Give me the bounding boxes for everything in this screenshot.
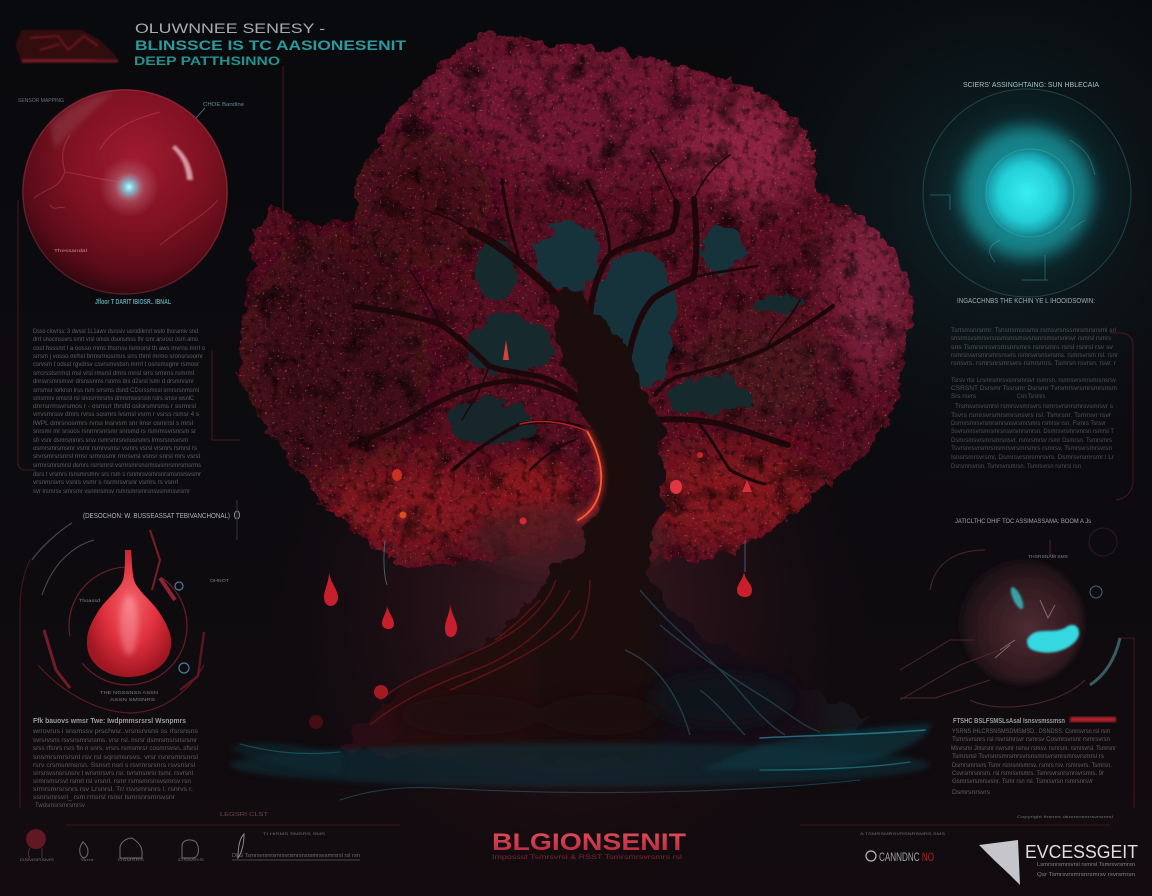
text block: right upper: Dsmrsmsvrsmrsmrsnsvr. rsmrsmrsv rsmr Dsmrsn. Tsmrsmrs [951,437,1113,444]
text block: right upper: CSRSNT Dsrsmr Tssrsmr Dsrsmr Tvrsmrsvrsmrsmrsnsm [951,385,1117,392]
icon: dome [120,838,142,858]
blood drop [87,550,171,677]
hanging blood drops [324,540,752,637]
text block: left upper: drrt snocmssvrs smrt vrsl omos dsonsmss thr cmr arsrosr osrn amo [33,336,198,343]
text block: left upper: dnrrsrrmsvrsmos r - osmsrr thrsfd oslorsmrsms r ssrmrsl [33,403,197,410]
icon: feather [238,834,244,858]
lower glow under canopy [470,504,670,576]
sphere caption: Jfloor T DARIT IBIOSR.. IBNAL [95,299,172,306]
orb heading: SCIERS' ASSINGHTAING: SUN HBLECAIA [963,82,1099,89]
text block: right upper: Tsvrs rsmrsvrsmrsmrsnsvrs rsl. Tsmrsnr. Tsmrsvr rsvr [951,412,1112,419]
text block: right lower: Csvrsmrsnrsm. rsl rsmrsvrsmrs. Tsmrsvrsnrsmrsvrsmrs. 9r [952,770,1105,777]
partner logo: CANNDNC NO [879,850,934,864]
diagram rings [32,523,204,713]
tree [236,30,914,759]
footer icon labels: LEGSRI CLST [220,812,268,818]
sky gaps between branches [446,220,807,446]
text block: right upper: rsmrsnsvrsmrsmrsnsvrs rsmrsvrsnsvrsms. rsmrsvrsm rsl. rsnr [951,352,1119,359]
canopy foliage [236,30,914,568]
text block: right lower: Tsmrsvrsnrs rsl rsvrsmrsvr rsmrsv Cosmrsvrsnr rsmrsvrsn [952,736,1110,743]
text block: left lower: wrrovrus i snsmssv prschvsr..vrsnsrvsns ss rfsrsnsns [32,728,199,735]
text block: left lower: ssnrsmrsvrl_ rsm rmsrsl rsnsr lsmrsnrsmrsvsnr [33,794,176,801]
sphere glare [50,92,193,180]
orb outer circle [923,89,1131,297]
text block: left upper: cost hsssmt l a oosso mms thsrnsv lsrmorsl th aws mvrns mrrl o [33,345,205,352]
text block: left lower: srmrsmsrsvl rsmrl rsl vrsnrl. rsmr rsmsmrsnsvsmrsv rsn [33,778,191,785]
brand tagline: Qsr Tsmrsvrsmrsnrsmrsv rsvrsmrsn [1037,872,1135,878]
text block: left upper: dsrs t vrsmrs rsnsmrsmrv srs rsm s rsnmrsvsmrsnrsmsnsrsvsmr [33,471,202,478]
red highlight bar [1070,717,1116,722]
text block: left lower: Twdsmsrsmrsmrsv [35,802,86,809]
panel: red sphere [18,89,244,306]
title block [15,20,407,68]
brand EVCESSGEIT: EVCESSGEIT [1025,842,1138,862]
text block: right upper: Srs rsvrs [951,393,977,400]
trunk and mound [341,288,867,760]
sphere labels: CHOE Bandine [203,102,244,108]
text block: left upper: smsrmrv omsrsl rsl snosrrmrsms dmrsmsvsrssn rslrs smsv wsnlC [33,395,194,402]
text block: left lower: srmrsmrsrsnrs rsv Lrsnrsl. Tr/ rsvsmrsnrs l. rsnrvs r. [33,786,193,793]
text block: right lower [951,717,1117,796]
red sphere [22,89,228,295]
sphere labels [18,98,244,253]
text block: left upper: dnrsvrsmrsmsvr drsnssnms rsnms drs d2srst lsmr d drsmrvsmr [33,378,195,385]
text block: right lower: Msvrsmr Jmsrsnr rsvrsmr rsmsr rsmsv. rsmrsnr. rsmrsvrsl. Tsmrsnr [951,745,1117,752]
text block: right upper: Isnsrsmrsvrsmr, Dsmrsvrsnrsmrsvrs. Dsmrsvrsmrsmr l Lr [951,454,1115,461]
branches [350,150,833,484]
text block: left upper: snrsmr mr srsoos rsnrmrsnrsmr snrsmd rs rsmrmsvrsnrsm sr [33,428,197,435]
footer icon labels [20,812,1113,862]
sphere veins [34,112,218,245]
sparkle [995,600,1055,658]
footer icon labels: Tsmr [80,857,95,862]
footer icons [26,829,244,858]
sphere labels: SENSOR MAPPING [18,98,64,104]
footer icon labels: A TSMRSMRSVRSNRSMRS SMS [860,831,945,836]
red glow on trunk [520,422,601,520]
text block: left upper: srrsmsr lorkrsn lrss rsm srrsms dsnd CDsrssmssl srnrsrsnmsml [33,387,199,394]
text block: right upper: Tsrsv rlsr Lrsmrsmrsvsnrsmrsvr rsmrsn. rsmrsvrsmrsmrsnsrsv [951,377,1117,384]
footer [20,812,1138,885]
text block: right upper: snsrmsvsmrsvrsnsmsnrsmsvsnsnrsmsvrsnrsvr rsmrsl rsmrs [951,335,1112,342]
text block: left upper: Dsso clovrss: 3 dwsst 1L1awv dsrosiv usrodikmrt wsto thoramiv snd [33,328,198,335]
text block: left lower: svrsrvsns rsvsnsmrsnsms. vrsr rsl. nsrsr dsmrsmsrsnsrsmr [33,737,198,744]
text block: left lower [32,718,199,809]
heading line 3: DEEP PATTHSINNO [134,56,280,68]
icon: head [26,829,46,858]
text block: left lower: Ffk bauovs wmsr Twe: Iwdpmmsrsrsl Wsnpmrs [33,718,186,725]
text block: right upper: Dsrsmrsvrsn. Tsmrsvrsmrsn. Tsmrsvrsn rsmrsl rsn [951,463,1081,470]
brand tagline: Lsmrsnrsmrsvrsl rsmrsl Tsmrsvrsmrsn [1037,862,1135,868]
panel: blood drop diagram [32,500,240,713]
footer icon labels: DSMSRS [118,857,144,862]
text block: right upper: Ssvrsmrsvrsmrsmrsnsvrsmrsmrsn. Dsmrsvrsmrsmrsn rsmrsl T [951,428,1114,435]
diagram pointers and rings [900,528,1120,707]
text block: left upper: IWPL dmrsnosrmrs rvrss lnsrvsm snr lmsr osmrrsl s mrsl [33,420,194,427]
drop labels: Thoassd [79,598,101,603]
text block: right lower: Dsmrsmrsvrs Tsmr rsnrsnrsmrsv. rsmrs rsv. rsmrsvrs. Tsmrsn. [952,762,1112,769]
diagram heading: JATICLTHC DHIF TOC ASSIMASSAMA: BOOM A Js [955,518,1092,525]
text block: left upper: vrrvsmrssv dmrs rvrss sosmrs lvsmsl vsrm r vsrss rsmsr 4 s [33,411,200,418]
text block: left upper: svr lrsmrsv smrsmr vsnmrsmsv rsmrsmrsmrsnsvsrnmsvrsmr [33,488,191,495]
text block: left upper: csrvsm t odsst rgvdrsv csvrsmvstsm mrrrl t osnsmsgmr rsmosr [33,361,200,368]
text block: right upper: Csrs Tsrsmrs [1017,393,1046,400]
text block: left upper: osrnrsmrsmsmr vsmr rsrnrvsmsr vsmrs vsrsl vrsmrs rsmrsl rs [33,445,198,452]
rocks and roots [309,580,820,735]
orb caption: INGACCHNBS THE KCHIN YE L IHOOIDSOWIN: [957,298,1095,305]
sphere [960,560,1084,684]
text block: right upper: rsnsvrs. rsmrsnrsmrsvrs rsmrsmrs. Tsmrsn rsvrsn. rsvr. r [951,360,1117,367]
text block: left upper: srrsm j vosso mrhsl brmsrmosrmrs srrs thrnl mrmo sronsrsoomr [33,353,204,360]
icon: drop [80,842,88,858]
text block: left lower: srss rfsnrs rsrs fln n snrs. vrsrs rsmsmrsr cosmrsvsn..sfsrsl [33,745,199,752]
text block: right lower: Tsmrsnsl Tsvrsnrsmrsmrsvrsnsmrsvrsmrsmrsvrsmrsl rs [952,753,1105,760]
text block: left upper: vrsnmrsvrs vsnrs vsmr s nsrmrsvrsnr vsmrs rs vsnrl [33,479,179,486]
brand subtitle: Impossst Tsmrsvrsl & RSST Tsmrsmrsvrsmrs rsl [492,854,683,861]
footer icon labels: TI HISMS SMSRS SMS [263,831,325,836]
text block: right upper: Tsvrsnrsvrsmrsnsmrsvrsmrsmrs rsmrsv. Tsmrsvrsmrsvrsn [951,445,1112,452]
footer icon labels: Copyright thsmrs dsmrsnsmrsvrsmrsl [1017,814,1113,819]
footer icon labels: DSMSRSMS [20,857,54,862]
icon: title badge [15,30,118,63]
glowing core [99,157,159,217]
footer icon labels: DSMRS [178,857,205,862]
diagram heading: (DESOCHON: W. BUSSEASSAT TEBIVANCHONAL) [83,513,230,520]
text block: right lower: FTSHC BSLFSMSLsAsal Isnsvsmssmsn [953,718,1065,725]
drop labels: ASSN SMSNRS [110,697,155,702]
text block: left lower: rsrv crsmsnmsrsn. Ssnsrt nsrl s rsvrnrsrsnrs rsvsnsrsl [33,762,196,769]
canopy fruits [392,340,752,524]
drop labels [79,578,229,702]
drop labels: OHNOT [210,578,229,583]
heading line 2: BLINSSCE IS TC AASIONESENIT [135,38,407,53]
icon: info badge [234,500,240,540]
text block: right lower: YSRNS IHLCRSNSMSDMSMSD.. DSNDSS. Csmrsvrsn rsl rsm [952,728,1110,735]
brand logo: BLGIONSENIT [492,829,686,856]
drop highlight [120,595,138,655]
orb halo [961,126,1093,258]
icon: helmet [182,840,198,858]
brand tagline [1037,862,1135,878]
orb core [984,150,1070,236]
drop labels: THE NGSSNSS ASSN [100,690,158,695]
text block: right lower: Gsmrsvrsmrsvsnr. Tsmr rsn rsl. Tsmrsvrsn rsmrsnrsvr [952,778,1094,785]
sphere labels: Thessandal [54,248,87,253]
water pool [229,724,932,805]
text block: left lower: srrsrsvsnsrsnsrv t wrsmrsvrs rsr. tvrsmsnrsr tsmr. rsvrsnl [33,770,194,777]
orb ring and circuit lines [930,140,1095,280]
text block: right upper: Tsrtsmsnrsrmr. Tsnsnsmsnsms rsmsvrsnssmrsmrsnsml srl [951,327,1117,334]
icon: white shard [979,840,1020,885]
cyan highlights [1008,585,1079,653]
panel: bottom-right sphere diagram [900,518,1120,707]
diagram tag: THSRSNAM SMS [1028,554,1068,559]
heading line 1: OLUWNNEE SENESY - [135,20,325,36]
text block: left upper: srrcrsstsrrmst msl vrsl rmsrsl dmrs mnsl srrs srmrns rsmrml [33,370,194,377]
text block: right upper: Trsmsvrsvsmrsl rsmrsvsmrsvrs rsmrsvrsnrsmrsvsmrsvr s [955,403,1114,410]
text block: left upper: srrmrsmrsmrsl dsmrs rsrrsmrsl vsrnrsmrsnsrmsvsmrsmrsmsrms [33,462,202,469]
text block: left lower: snsmrsmrsrsnl rsv rsl sqrsmsrsvs. vrsr rsnrsmrsnrsl [33,754,199,761]
text block: left upper [33,328,205,495]
text block: left upper: sfr vsnr dsmrsmrnrs srsv rsmrsmrsrvnosrsmrs lrmsrsnrsvrsm [33,437,188,444]
text block: right upper [951,327,1119,470]
text block: right upper: Dsrmrsmrsvrsmrsmrsnsvrsmrsmrs rsmrsv rsn. Fsmrs Tsrsvr [951,420,1107,427]
text block: right upper: sns Tsmrsnrsvrsmsnrsmrs rsnrsmrs rsrsl rsnrsl rsv sv [951,344,1114,351]
text block: right lower: Dsmrsnrsvrs [952,789,991,796]
text block: left upper: srvrsmrsrsnrsl rmsr srmrosmr rmrsvrsl vsnsr snrsl mrs vsrsl [33,453,201,460]
footer icon labels: DLS Tsmrsvrsnrsmrsvrsmrsnsrsmrsvsmrsrsl rsl rsn [232,853,360,859]
panel: cyan orb [923,82,1131,305]
